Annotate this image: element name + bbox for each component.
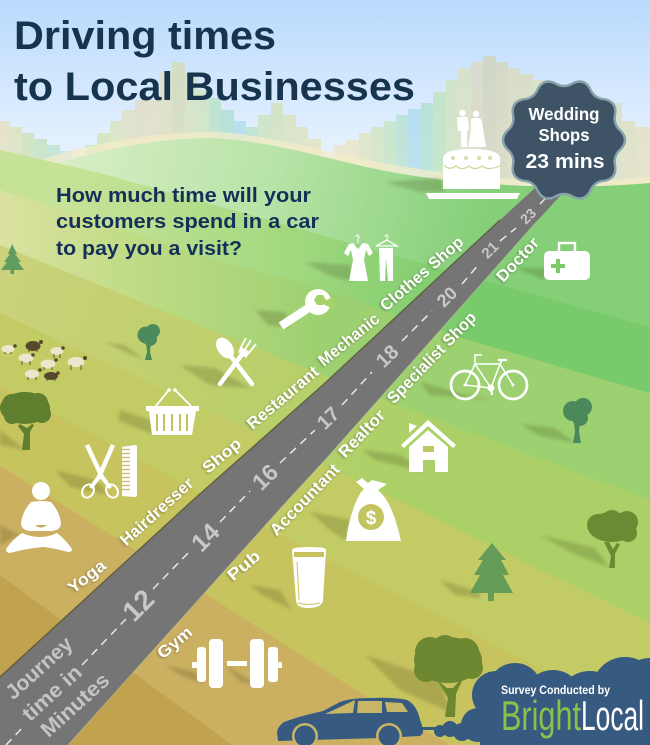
business labels along the road: Hairdresser [117,474,198,549]
business labels along the road: Realtor [335,406,389,461]
icon: large green tree left [0,392,51,450]
icon: wedding cake [426,110,520,199]
icon: dumbbell [192,639,282,688]
business labels along the road: Shop [199,435,245,477]
road caption: journey time in minutes: Journey [1,632,78,704]
icon: small pine [1,244,24,274]
pale ridge behind the hill [0,132,650,260]
question text [56,185,319,260]
exhaust cloud [420,657,650,745]
car [277,698,423,745]
icon: spoon and fork [212,334,256,384]
icon: tree teal small [138,324,160,360]
business labels along the road: Gym [154,623,196,663]
question text: to pay you a visit? [56,238,242,260]
badge text: wedding shops 23 mins: Wedding [528,104,600,124]
stepped mountain skyline [0,56,650,231]
business labels along the road: Doctor [493,234,543,286]
journey time numbers [116,205,539,627]
icon: pint glass [292,547,326,608]
icon: tree green right [587,510,638,568]
journey time numbers: 21 [478,238,502,262]
icon: house [401,420,456,472]
business labels along the road: Pub [224,547,264,585]
badge text: wedding shops 23 mins: 23 mins [526,150,604,173]
business labels along the road: Mechanic [315,310,383,370]
icon: money bag [346,478,401,541]
badge text: wedding shops 23 mins: Shops [538,125,590,145]
journey time numbers: 18 [372,341,403,372]
question text: customers spend in a car [56,211,319,233]
icon: yoga figure [6,482,72,553]
road caption: journey time in minutes: Minutes [36,669,114,742]
road caption: journey time in minutes: time in [18,661,87,726]
title: Driving times [14,14,276,58]
journey time numbers: 16 [247,459,283,495]
icon: big tree by car [414,635,483,717]
icon: tree teal right [563,398,592,443]
credit: survey conducted by brightlocal: Bright [501,692,581,739]
question text: How much time will your [56,185,311,207]
journey time numbers: 14 [186,518,226,557]
icon: shopping basket [146,388,199,435]
journey time numbers: 12 [116,583,160,627]
business labels along the road: Specialist Shop [384,309,480,407]
title [14,14,415,109]
title: to Local Businesses [14,65,415,109]
credit: survey conducted by brightlocal: Survey Conducted by [501,685,611,697]
badge text: wedding shops 23 mins [526,104,604,173]
green hill [0,138,650,360]
icon: bicycle [451,355,527,399]
business labels along the road: Yoga [65,556,110,597]
journey time numbers: 17 [313,403,344,434]
sky background [0,0,650,215]
icon: doctor medical case [544,243,590,280]
road caption: journey time in minutes [1,632,114,742]
journey time numbers: 20 [433,283,461,311]
icon: scissors and comb [80,444,137,500]
icon: dress and trousers on hangers [344,235,397,281]
icon: wrench [281,289,333,326]
ground shadows [0,178,610,712]
sheep flock [2,340,87,381]
credit: survey conducted by brightlocal [501,685,644,739]
road centre dashes [6,178,565,745]
icon: pine tree [470,543,513,601]
business labels along the road [65,233,543,663]
icon: money bag: $ [366,508,377,529]
icon: wedding badge scalloped medallion [503,82,625,198]
road [0,185,570,745]
business labels along the road: Restaurant [244,362,323,433]
field bands [0,150,650,745]
journey time numbers: 23 [517,205,539,227]
business labels along the road: Accountant [267,460,344,539]
business labels along the road: Clothes Shop [377,233,467,315]
